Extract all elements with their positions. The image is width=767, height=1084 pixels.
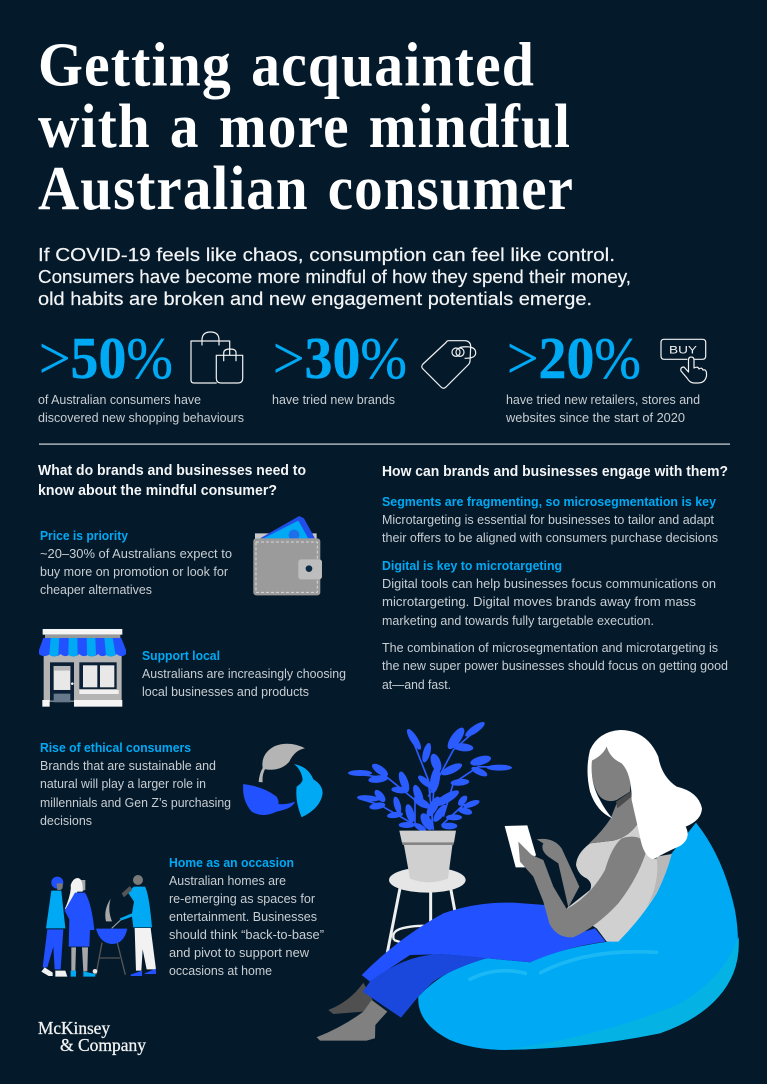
plant leaves bbox=[348, 720, 512, 833]
neck and chest bbox=[589, 795, 639, 843]
title: Australian consumer bbox=[38, 155, 574, 223]
block: segments bbox=[382, 495, 718, 545]
block: price is priority: cheaper alternatives bbox=[40, 583, 152, 597]
block: rise of ethical consumers: Brands that are sustainable and bbox=[40, 759, 216, 773]
block: home as an occasion: occasions at home bbox=[169, 964, 272, 978]
block: support local: Australians are increasingly choosing bbox=[142, 667, 346, 681]
right column heading: How can brands and businesses engage with them? bbox=[382, 464, 728, 480]
beanbag bbox=[418, 823, 739, 1050]
logo: McKinsey & Company bbox=[38, 1018, 146, 1055]
torso shading bbox=[647, 854, 672, 907]
block: rise of ethical consumers: Rise of ethical consumers bbox=[40, 741, 191, 755]
stat: more than 20 percent: >20% bbox=[507, 325, 641, 391]
icon: buy button with hand: BUY bbox=[669, 344, 698, 356]
tablet bbox=[505, 825, 536, 867]
block: home as an occasion: Home as an occasion bbox=[169, 856, 294, 870]
intro paragraph: If COVID-19 feels like chaos, consumption can feel like control. bbox=[38, 245, 615, 265]
block: segments: Segments are fragmenting, so microsegmentation is key bbox=[382, 495, 716, 509]
plant stool bbox=[387, 867, 466, 953]
block: digital: marketing and towards fully targetable execution. bbox=[382, 614, 654, 628]
logo: McKinsey & Company: & Company bbox=[60, 1035, 146, 1055]
back foot bbox=[328, 983, 373, 1014]
block: segments: their offers to be aligned with consumers purchase decisions bbox=[382, 531, 718, 545]
block: home as an occasion: re-emerging as spaces for bbox=[169, 892, 315, 906]
logo: McKinsey & Company: McKinsey bbox=[38, 1018, 110, 1038]
neck shadow bbox=[616, 792, 632, 808]
block: digital: Digital tools can help businesses focus communications on bbox=[382, 577, 716, 591]
block: rise of ethical consumers bbox=[40, 741, 231, 828]
stat: more than 30 percent: have tried new brands bbox=[272, 393, 395, 407]
block: support local: local businesses and products bbox=[142, 685, 309, 699]
face bbox=[592, 747, 631, 801]
block: support local: Support local bbox=[142, 649, 220, 663]
far arm bbox=[537, 839, 579, 907]
intro paragraph: Consumers have become more mindful of how they spend their money, bbox=[38, 267, 631, 287]
block: combination bbox=[382, 641, 728, 692]
stat: more than 30 percent bbox=[272, 325, 476, 407]
left column heading: What do brands and businesses need to bbox=[38, 463, 306, 479]
title: with a more mindful bbox=[38, 93, 571, 161]
front foot bbox=[317, 1000, 387, 1041]
block: rise of ethical consumers: decisions bbox=[40, 814, 92, 828]
block: combination: The combination of microsegmentation and microtargeting is bbox=[382, 641, 718, 655]
icon: storefront bbox=[39, 629, 126, 707]
block: support local bbox=[142, 649, 346, 699]
illustration: woman on beanbag with plant bbox=[317, 720, 739, 1050]
barbecue grill bbox=[93, 899, 127, 975]
icon: recycling leaves bbox=[243, 744, 323, 817]
icon: price tag bbox=[422, 341, 476, 388]
stat: more than 50 percent bbox=[38, 325, 244, 425]
intro paragraph: old habits are broken and new engagement potentials emerge. bbox=[38, 289, 592, 309]
plant pot bbox=[399, 831, 456, 882]
block: home as an occasion: and pivot to support new bbox=[169, 946, 310, 960]
left column heading bbox=[38, 463, 306, 499]
block: price is priority: buy more on promotion or look for bbox=[40, 565, 228, 579]
block: combination: at—and fast. bbox=[382, 678, 451, 692]
icon: buy button with hand bbox=[661, 339, 706, 383]
stat: more than 20 percent bbox=[505, 325, 706, 425]
stat: more than 30 percent: >30% bbox=[273, 325, 407, 391]
block: home as an occasion bbox=[169, 856, 324, 978]
stat: more than 50 percent: >50% bbox=[39, 325, 173, 391]
stat: more than 20 percent: websites since the start of 2020 bbox=[505, 411, 685, 425]
icon: shopping bags bbox=[191, 332, 243, 383]
block: digital: microtargeting. Digital moves brands away from mass bbox=[382, 595, 696, 609]
illustration: people at barbecue bbox=[41, 875, 156, 977]
block: price is priority: Price is priority bbox=[40, 529, 128, 543]
intro paragraph bbox=[38, 245, 631, 309]
icon: wallet bbox=[253, 516, 322, 595]
trousers bbox=[362, 903, 606, 1018]
near arm bbox=[518, 837, 646, 937]
divider bbox=[39, 444, 730, 445]
block: home as an occasion: should think “back-to-base” bbox=[169, 928, 324, 942]
block: segments: Microtargeting is essential for businesses to tailor and adapt bbox=[382, 513, 715, 527]
block: digital: Digital is key to microtargeting bbox=[382, 559, 562, 573]
block: price is priority bbox=[40, 529, 232, 597]
block: combination: the new super power businesses should focus on getting good bbox=[382, 659, 728, 673]
stat: more than 50 percent: discovered new shopping behaviours bbox=[38, 411, 244, 425]
hair bbox=[587, 730, 702, 859]
title bbox=[38, 32, 574, 223]
block: digital bbox=[382, 559, 716, 628]
block: home as an occasion: entertainment. Businesses bbox=[169, 910, 317, 924]
block: rise of ethical consumers: millennials and Gen Z’s purchasing bbox=[40, 796, 231, 810]
block: price is priority: ~20–30% of Australians expect to bbox=[40, 547, 232, 561]
man with beard bbox=[41, 877, 67, 977]
man grilling bbox=[120, 875, 156, 976]
stat: more than 20 percent: have tried new retailers, stores and bbox=[506, 393, 700, 407]
title: Getting acquainted bbox=[38, 32, 535, 100]
stat: more than 50 percent: of Australian consumers have bbox=[38, 393, 201, 407]
torso bbox=[567, 822, 672, 942]
woman with white hair bbox=[65, 878, 95, 977]
block: rise of ethical consumers: natural will play a larger role in bbox=[40, 777, 206, 791]
block: home as an occasion: Australian homes are bbox=[169, 874, 286, 888]
left column heading: know about the mindful consumer? bbox=[38, 483, 277, 499]
